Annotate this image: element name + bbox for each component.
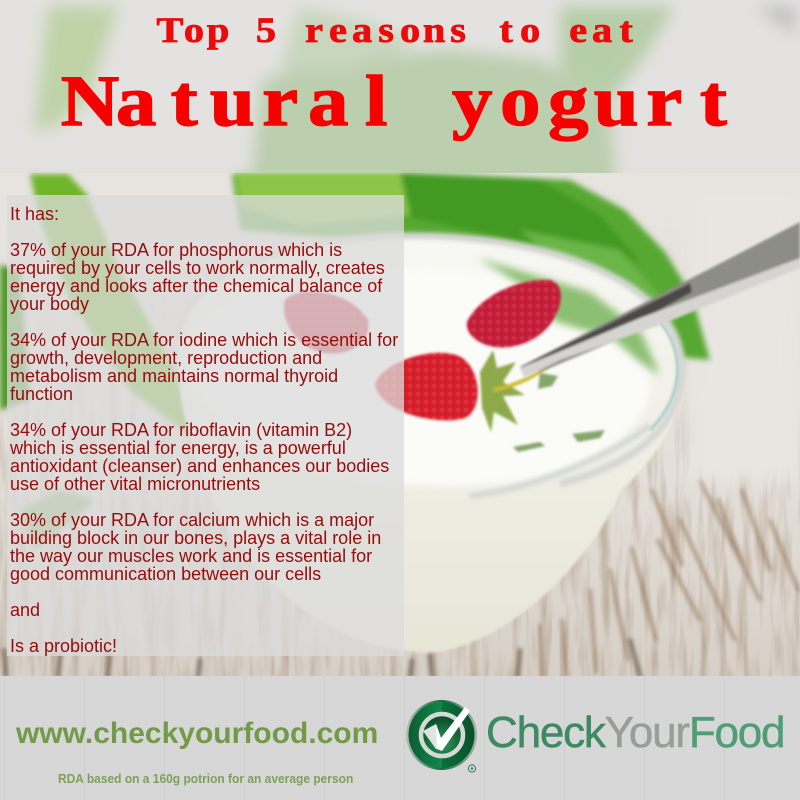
brand wordmark: CheckYourFood <box>486 708 784 757</box>
text block: reasons: your body <box>10 294 89 314</box>
wood table <box>0 410 800 676</box>
text block: reasons: building block in our bones, plays a vital role in <box>10 528 381 548</box>
title: top line: Top 5 reasons to eat <box>157 11 633 50</box>
text block: reasons: growth, development, reproduction and <box>10 348 322 368</box>
text block: reasons: which is essential for energy, is a powerful <box>10 438 346 458</box>
header band <box>0 0 800 173</box>
mint leaves <box>0 172 710 550</box>
text block: reasons: and <box>10 600 40 620</box>
text block: reasons: the way our muscles work and is essential for <box>10 546 372 566</box>
text block: reasons: energy and looks after the chemical balance of <box>10 276 382 296</box>
text block: reasons: 37% of your RDA for phosphorus which is <box>10 240 342 260</box>
spoon <box>520 222 800 378</box>
text block: reasons: 34% of your RDA for riboflavin (vitamin B2) <box>10 420 352 440</box>
text block: reasons: antioxidant (cleanser) and enhances our bodies <box>10 456 389 476</box>
icon: CheckYourFood logo <box>406 700 477 773</box>
text block: reasons: Is a probiotic! <box>10 636 117 656</box>
title: Natural yogurt: Natural yogurt <box>61 61 727 141</box>
text block: reasons: It has: <box>10 204 59 224</box>
text block: reasons: use of other vital micronutrients <box>10 474 260 494</box>
website url: www.checkyourfood.com <box>16 717 378 750</box>
text block: reasons: 34% of your RDA for iodine which is essential for <box>10 330 398 350</box>
text block: reasons: function <box>10 384 73 404</box>
text block: reasons: metabolism and maintains normal thyroid <box>10 366 338 386</box>
text block: reasons: good communication between our cells <box>10 564 321 584</box>
footnote: RDA based on a 160g potrion for an average person <box>58 771 353 786</box>
yogurt bowl <box>178 236 682 652</box>
strawberries <box>284 280 605 452</box>
text block: reasons: required by your cells to work normally, creates <box>10 258 385 278</box>
blurred jar and mint behind header <box>28 0 800 173</box>
footer band <box>0 676 800 800</box>
title <box>61 11 728 142</box>
text block: reasons <box>10 204 398 656</box>
text block: reasons: 30% of your RDA for calcium which is a major <box>10 510 374 530</box>
panel: nutrient text <box>7 195 404 656</box>
